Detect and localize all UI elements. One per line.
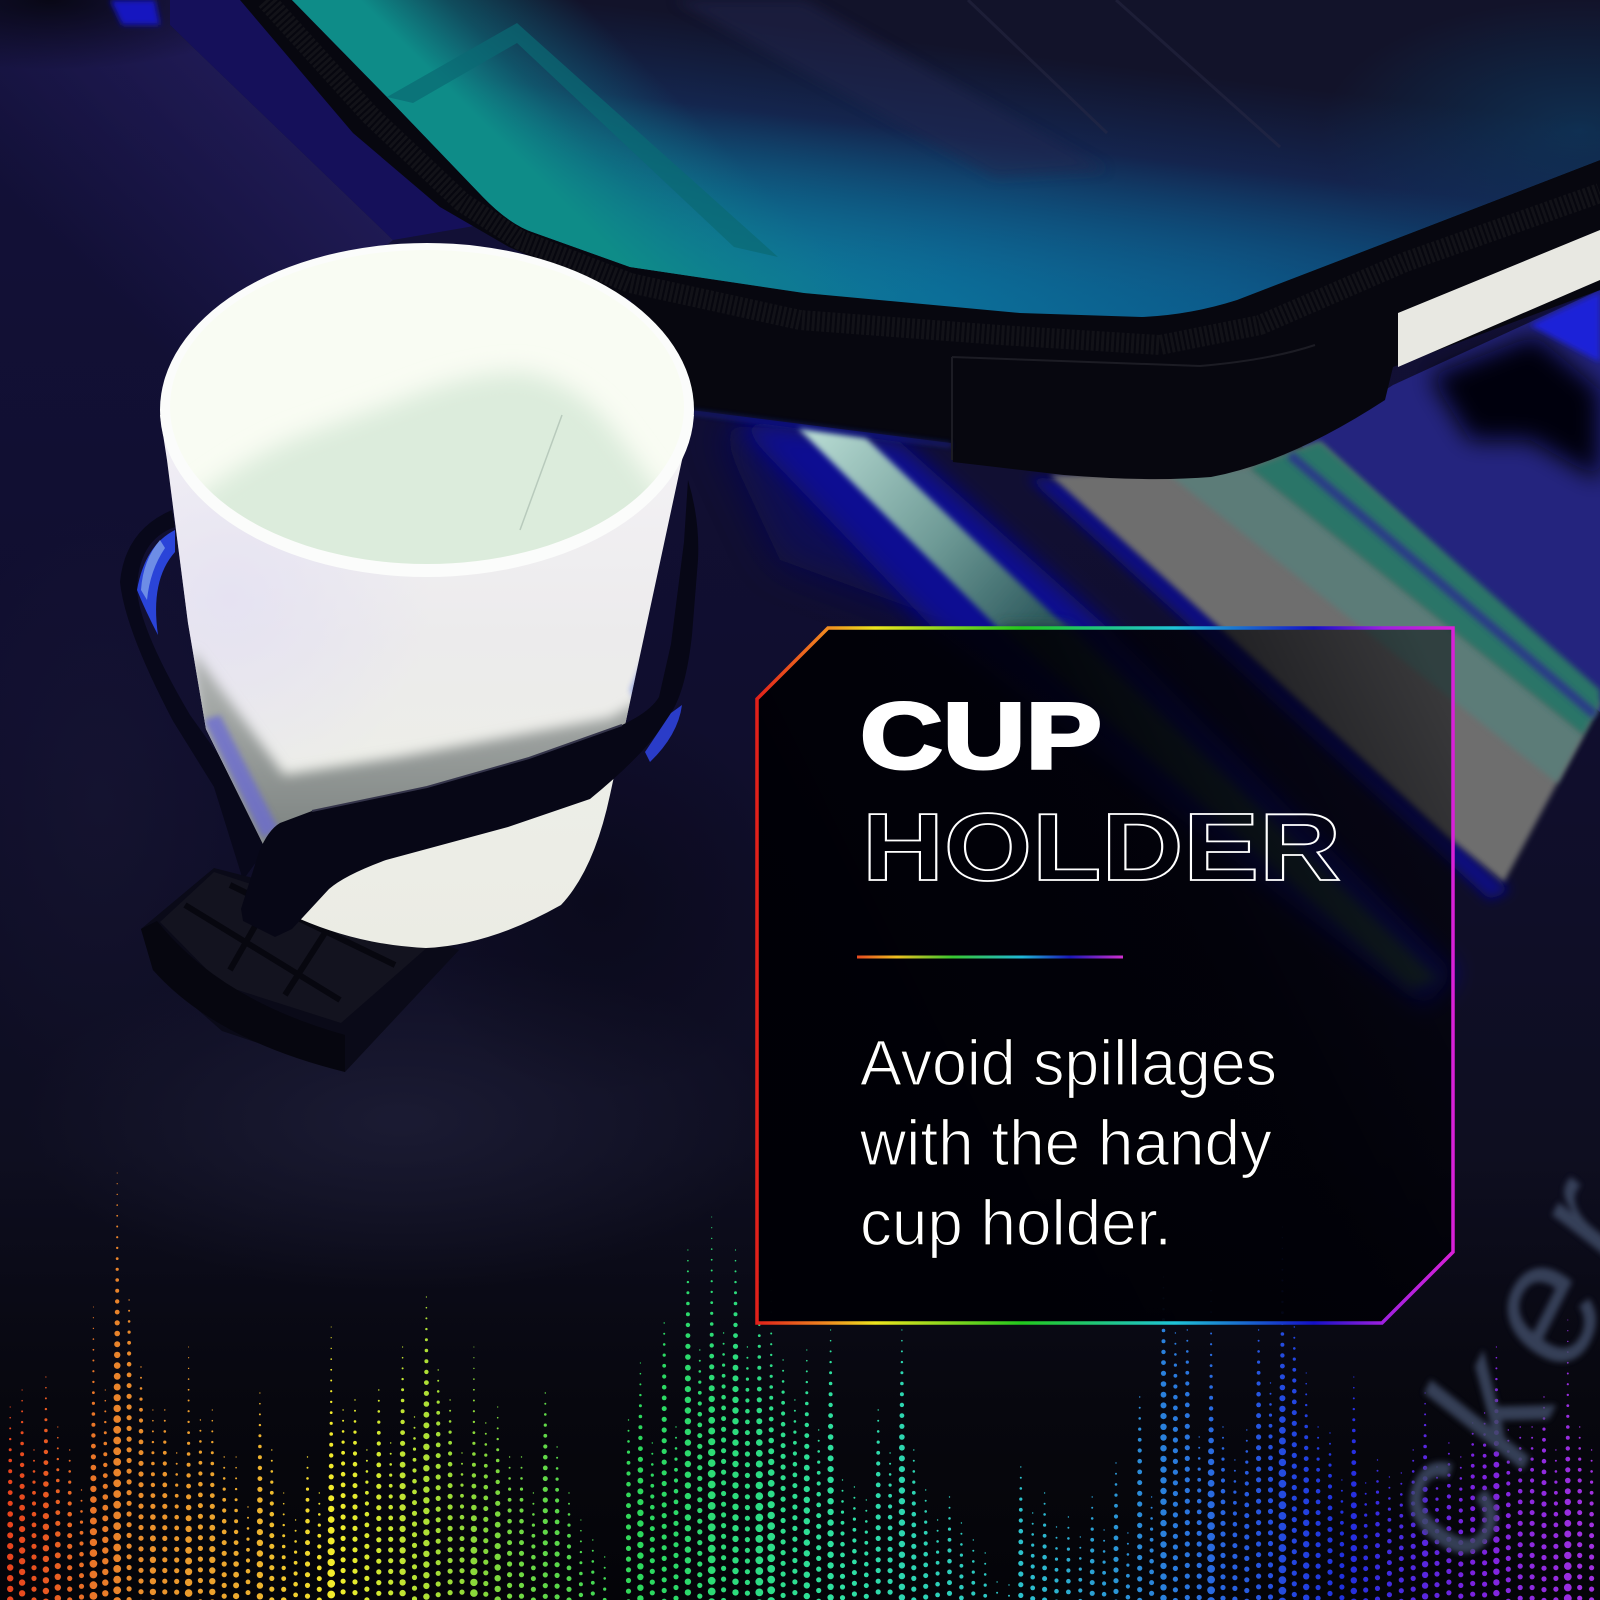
divider	[857, 956, 1123, 958]
panel rainbow border	[757, 628, 1453, 1323]
body text: Avoid spillages	[860, 1027, 1277, 1099]
reflection: blue halo left	[734, 420, 1455, 1008]
frame edge glow	[691, 412, 951, 445]
reflection: bright blue	[1530, 292, 1600, 362]
cup holder: tray	[141, 868, 459, 1072]
body text: with the handy	[859, 1107, 1272, 1179]
band blue reflection	[645, 705, 682, 762]
reflection: blue halo right	[1027, 477, 1510, 900]
cup rim	[160, 243, 694, 577]
cup shadow and reflections	[168, 466, 638, 844]
reflection: purple-blue band	[1300, 290, 1600, 712]
floor reflection of LED strip	[717, 290, 1600, 1008]
heading: HOLDER	[862, 794, 1341, 901]
cup inside	[188, 344, 671, 564]
panel background	[757, 628, 1453, 1323]
body text	[859, 1027, 1277, 1259]
LED strip	[1398, 230, 1600, 367]
equalizer dots	[7, 1172, 1594, 1600]
floor lighting wedges	[0, 0, 800, 1290]
band highlight	[312, 725, 622, 811]
cup holder: front band	[241, 480, 698, 937]
heading	[860, 683, 1341, 901]
reflection: dark blob below LED	[1430, 335, 1600, 480]
cup body	[160, 415, 694, 948]
reflection: light band	[798, 428, 1067, 628]
cup	[150, 243, 694, 948]
corner bracket seam	[952, 345, 1315, 460]
reflection: grey band	[1050, 442, 1600, 882]
stitched mat border	[266, 0, 1600, 345]
reflection: teal stripe	[1249, 442, 1600, 735]
panel: cup holder callout	[757, 628, 1453, 1323]
reflection: band continuation	[998, 625, 1440, 990]
desk mat	[292, 0, 1600, 317]
desk frame	[240, 0, 1600, 479]
heading: CUP	[860, 683, 1102, 788]
reflection: thin blue stripe	[1290, 455, 1595, 715]
reflection: grey-teal mix	[1163, 468, 1583, 783]
body text: cup holder.	[860, 1187, 1172, 1259]
reflection: broad blue glow	[717, 425, 1000, 640]
cup holder: rear loop	[120, 510, 265, 880]
